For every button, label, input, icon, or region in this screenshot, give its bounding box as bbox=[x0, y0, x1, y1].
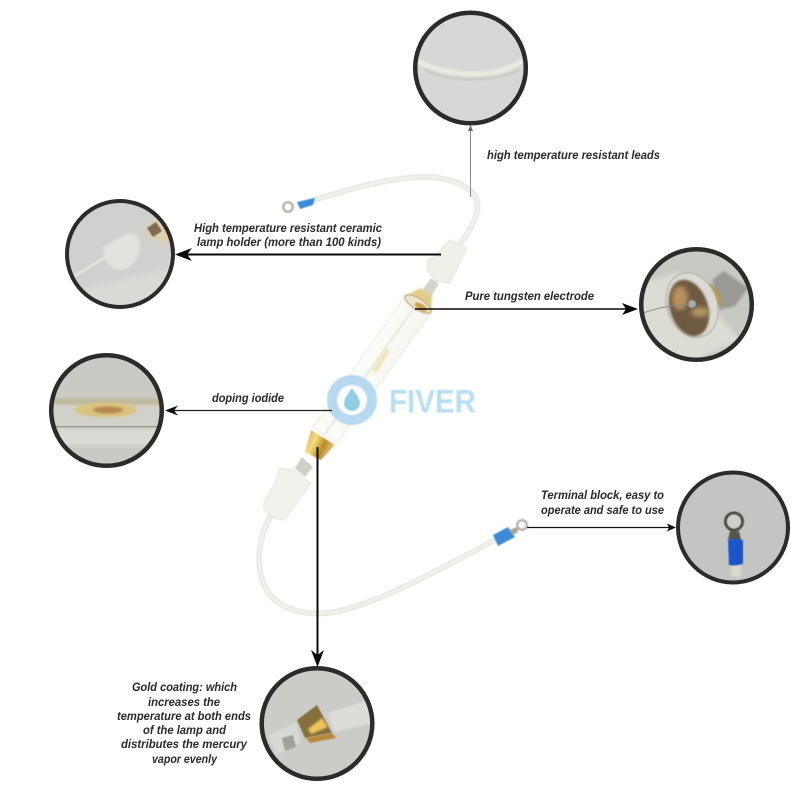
leader: tungsten electrode bbox=[415, 303, 638, 315]
label: gold coating: vapor evenly bbox=[152, 754, 218, 766]
leader: ceramic holder bbox=[175, 248, 441, 261]
label: terminal block bbox=[541, 490, 665, 517]
circle: doping iodide detail bbox=[49, 355, 165, 466]
circle: ceramic holder detail bbox=[67, 201, 175, 310]
bottom ceramic holder bbox=[263, 468, 311, 520]
label: terminal block: Terminal block, easy to bbox=[541, 490, 664, 502]
bottom metal stem bbox=[295, 457, 313, 477]
leader: doping iodide bbox=[165, 406, 332, 416]
label: terminal block: operate and safe to use bbox=[541, 505, 665, 517]
label: high temperature resistant leads: high temperature resistant leads bbox=[487, 150, 660, 162]
glass tube bbox=[313, 291, 434, 443]
logo wordmark: FIVER bbox=[389, 384, 476, 420]
label: ceramic lamp holder bbox=[194, 223, 383, 249]
label: gold coating: of the lamp and bbox=[143, 725, 227, 737]
label: gold coating: increases the bbox=[148, 697, 221, 709]
circle: leads detail bbox=[415, 13, 526, 123]
circle: terminal block detail bbox=[678, 472, 788, 582]
bottom lead wire bbox=[259, 517, 493, 613]
watermark logo bbox=[332, 380, 476, 420]
leader: gold coating bbox=[311, 447, 324, 667]
top metal stem bbox=[420, 278, 439, 299]
label: gold coating: temperature at both ends bbox=[117, 711, 251, 723]
lamp product photo bbox=[259, 177, 527, 613]
circle: gold coating detail bbox=[262, 668, 376, 779]
label: ceramic lamp holder: High temperature resistant ceramic bbox=[194, 223, 383, 235]
leader: terminal block bbox=[527, 524, 676, 532]
label: gold coating bbox=[117, 682, 251, 766]
logo ring with drop bbox=[332, 380, 372, 420]
leader: leads bbox=[468, 125, 473, 197]
circle: tungsten electrode detail bbox=[640, 249, 752, 362]
label: ceramic lamp holder: lamp holder (more than 100 kinds) bbox=[197, 237, 381, 249]
label: doping iodide: doping iodide bbox=[212, 393, 285, 405]
bottom gold cap bbox=[305, 430, 335, 460]
label: pure tungsten electrode: Pure tungsten electrode bbox=[465, 291, 595, 303]
top lead wire bbox=[305, 177, 478, 250]
top ceramic holder bbox=[427, 240, 467, 283]
label: gold coating: Gold coating: which bbox=[132, 682, 237, 694]
label: gold coating: distributes the mercury bbox=[121, 739, 248, 751]
bottom ring terminal bbox=[493, 520, 527, 546]
top ring terminal bbox=[283, 198, 315, 212]
top gold cap bbox=[406, 288, 432, 310]
